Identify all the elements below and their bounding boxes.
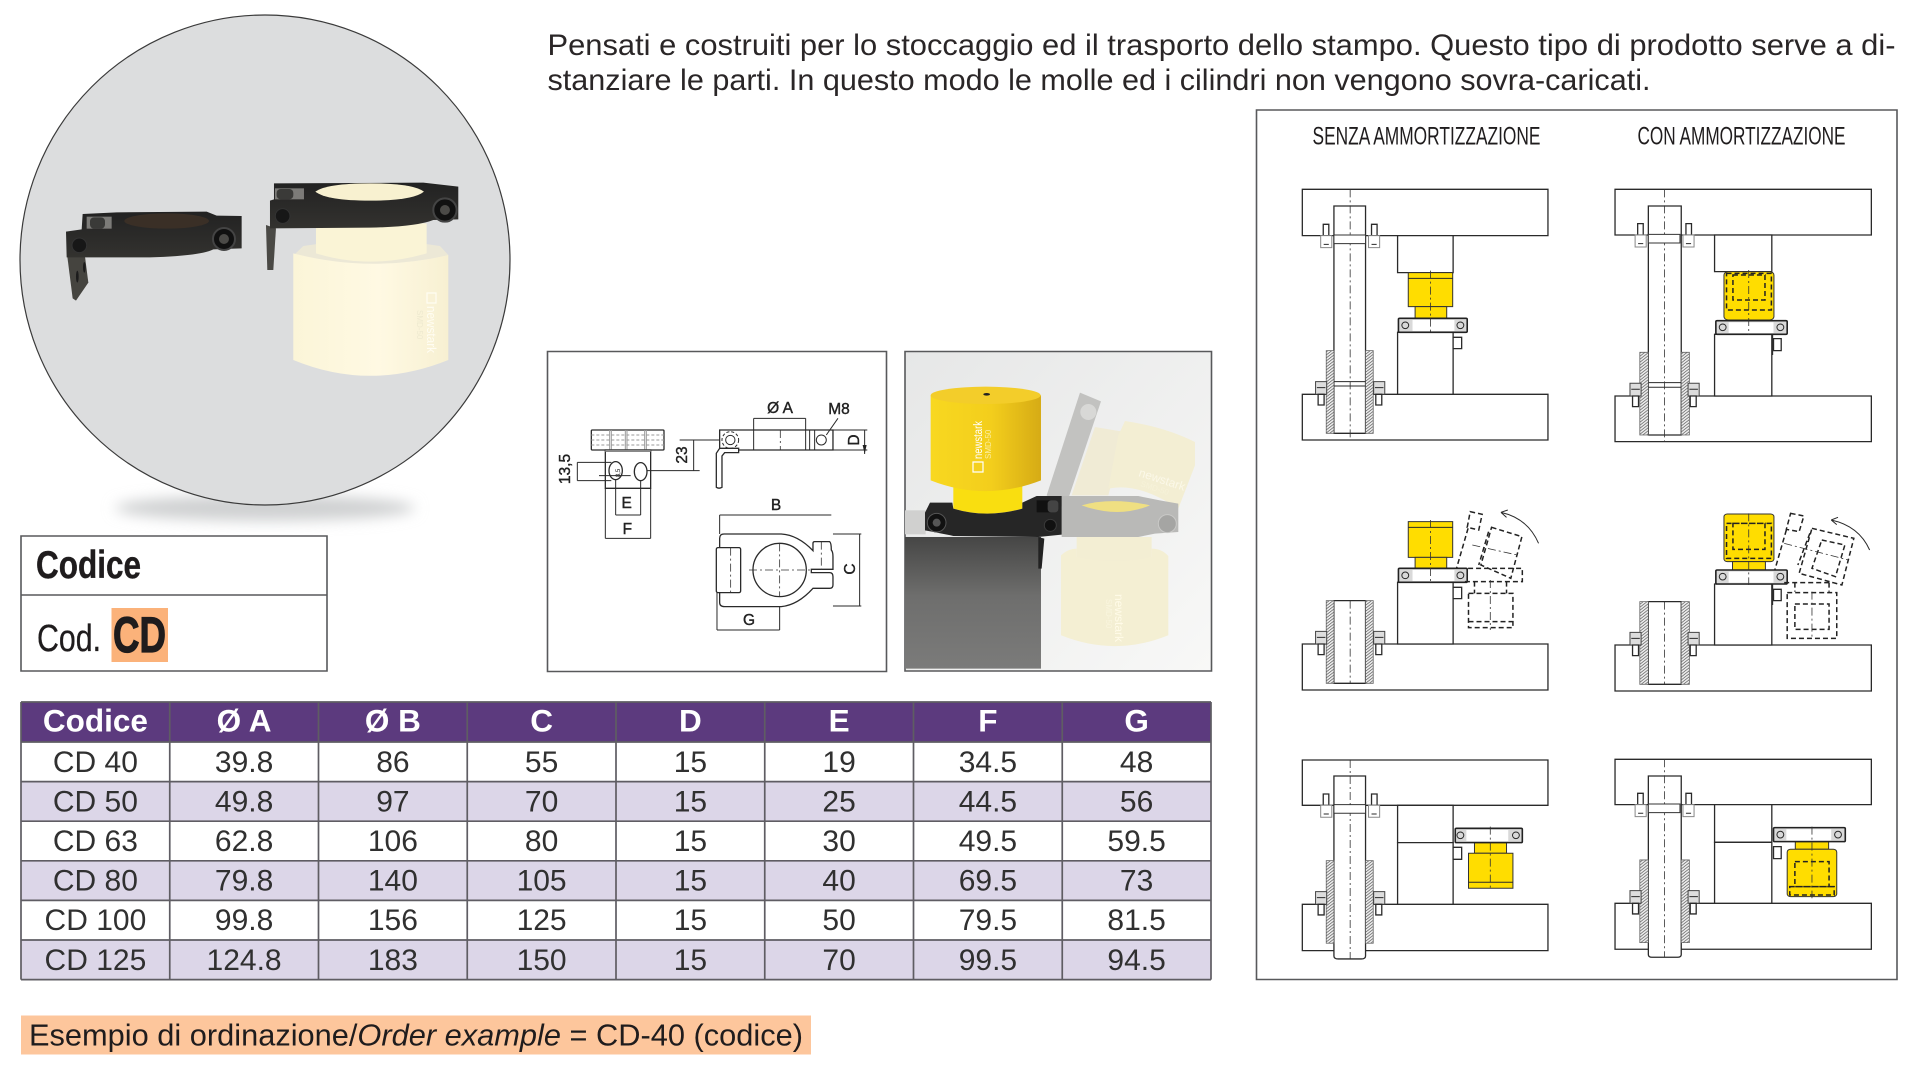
dimension labels: [557, 400, 863, 629]
table rows: 73: [1120, 865, 1153, 898]
table rows: 15: [674, 746, 707, 779]
intro paragraph: Pensati e costruiti per lo stoccaggio ed il trasporto dello stampo. Questo tipo di prodotto serve a di-: [548, 29, 1896, 62]
dimension table: [21, 702, 1211, 980]
dimension labels: 8,5: [616, 468, 622, 477]
table rows: 48: [1120, 746, 1153, 779]
table rows: 70: [525, 785, 558, 818]
table header: [21, 702, 1211, 742]
callout text: Esempio di ordinazione/Order example = CD-40 (codice): [29, 1018, 803, 1052]
box frame: [21, 536, 327, 671]
diagram: without damping, open: [1302, 510, 1548, 690]
table rows: 55: [525, 746, 558, 779]
table rows: 81.5: [1107, 904, 1166, 937]
photo brand text: newstark: [1112, 594, 1126, 643]
table rows: 125: [517, 904, 567, 937]
table header: D: [679, 702, 702, 738]
yellow damper: [931, 387, 1041, 514]
table rows: 44.5: [959, 785, 1017, 818]
drawing frame: [548, 352, 886, 672]
table rows: 94.5: [1107, 944, 1166, 977]
table rows: 15: [674, 865, 707, 898]
table header: C: [530, 702, 553, 738]
dimension labels: C: [842, 563, 859, 575]
grey circle background: [20, 15, 510, 505]
cylinder brand text: SMD-50: [415, 310, 424, 340]
photo brand text: SMD-50: [1139, 479, 1171, 497]
table rows: 150: [517, 944, 567, 977]
dimension labels: B: [771, 497, 781, 514]
dimension labels: D: [846, 434, 863, 446]
diagram: without damping, stored: [1302, 760, 1548, 959]
diagram: with damping, open: [1615, 513, 1871, 691]
line work: [577, 418, 867, 630]
photo brand text: newstark: [1137, 466, 1188, 494]
dashed travel ghost: [1457, 512, 1522, 630]
table rows: 15: [674, 825, 707, 858]
diagrams frame: [1256, 110, 1897, 980]
table header: G: [1124, 702, 1149, 738]
photo brand text: newstark: [973, 421, 985, 459]
table rows: 39.8: [215, 746, 273, 779]
table rows: 15: [674, 904, 707, 937]
rotation arrow: [1501, 510, 1539, 543]
dimension labels: 13,5: [557, 454, 574, 484]
table header: Ø B: [365, 702, 421, 738]
empty black clamp: [66, 212, 242, 301]
ghost cylinder positions: [1047, 393, 1195, 646]
table rows: 97: [376, 785, 410, 818]
rotation arrow: [1831, 517, 1870, 550]
dashed travel ghost: [1775, 513, 1854, 638]
table rows: 105: [517, 865, 567, 898]
table rows: 34.5: [959, 746, 1017, 779]
circle shadow: [115, 495, 415, 521]
cylinder brand text: newstark: [424, 306, 439, 353]
table rows: 86: [376, 746, 410, 779]
dimension labels: G: [743, 612, 755, 629]
panel: technical drawing: [548, 352, 886, 672]
table rows: 62.8: [215, 825, 273, 858]
dimension labels: Ø A: [767, 400, 794, 417]
table rows: 25: [822, 785, 856, 818]
table header: F: [978, 702, 998, 738]
CD highlight: [112, 608, 168, 662]
table rows: 79.8: [215, 865, 273, 898]
panel: application photo: [905, 352, 1212, 671]
table rows: 49.5: [959, 825, 1017, 858]
photo brand text: SMD-50: [984, 429, 993, 459]
dimension labels: M8: [828, 401, 850, 418]
table rows: 56: [1120, 785, 1153, 818]
table rows: CD 125: [45, 944, 146, 977]
table rows: CD 100: [45, 904, 146, 937]
table rows: 15: [674, 944, 707, 977]
table rows: CD 40: [53, 746, 138, 779]
table rows: [21, 702, 1211, 980]
intro paragraph: stanziare le parti. In questo modo le molle ed i cilindri non vengono sovra-caricati.: [548, 64, 1650, 97]
CD code: CD: [113, 607, 166, 663]
photo brand text: SMD-50: [1104, 599, 1113, 629]
table rows: CD 50: [53, 785, 138, 818]
table rows: 140: [368, 865, 418, 898]
table rows: 69.5: [959, 865, 1017, 898]
panel: usage diagrams: [1256, 110, 1897, 980]
codice box: [21, 536, 327, 671]
clamp mounted on cream cylinder: [266, 183, 458, 376]
table rows: 99.8: [215, 904, 273, 937]
cod. prefix: Cod.: [37, 618, 101, 660]
table rows: CD 63: [53, 825, 138, 858]
order example callout: [21, 1016, 811, 1054]
black clamp: [925, 496, 1062, 537]
dimension labels: F: [623, 521, 632, 538]
table rows: CD 80: [53, 865, 138, 898]
table rows: 49.8: [215, 785, 273, 818]
table rows: 70: [822, 944, 856, 977]
cylinder brand text: [415, 293, 439, 353]
table rows: 80: [525, 825, 558, 858]
table rows: 124.8: [207, 944, 282, 977]
table header: Codice: [43, 702, 148, 738]
table rows: 19: [822, 746, 856, 779]
product illustration: circle with clamps and cylinder: [20, 15, 510, 521]
dimension labels: E: [622, 495, 632, 512]
steel block: [905, 537, 1041, 669]
diagram: without damping, closed: [1302, 189, 1548, 440]
diagram: with damping, stored: [1615, 759, 1871, 957]
codice label: Codice: [36, 544, 141, 587]
table rows: 156: [368, 904, 418, 937]
callout background: [21, 1016, 811, 1054]
table rows: 50: [822, 904, 856, 937]
table rows: 106: [368, 825, 418, 858]
table rows: 30: [822, 825, 856, 858]
table header: E: [829, 702, 850, 738]
table rows: 183: [368, 944, 418, 977]
table rows: 99.5: [959, 944, 1017, 977]
table rows: 79.5: [959, 904, 1017, 937]
dimension labels: 23: [674, 446, 691, 464]
diagram: with damping, closed: [1615, 189, 1871, 442]
photo background: [905, 352, 1212, 671]
table header: Ø A: [217, 702, 272, 738]
photo brand text: [973, 421, 1188, 643]
intro paragraph: [548, 29, 1896, 97]
heading: senza ammortizzazione: SENZA AMMORTIZZAZIONE: [1312, 122, 1540, 150]
table rows: 15: [674, 785, 707, 818]
table rows: 40: [822, 865, 856, 898]
table rows: 59.5: [1107, 825, 1166, 858]
